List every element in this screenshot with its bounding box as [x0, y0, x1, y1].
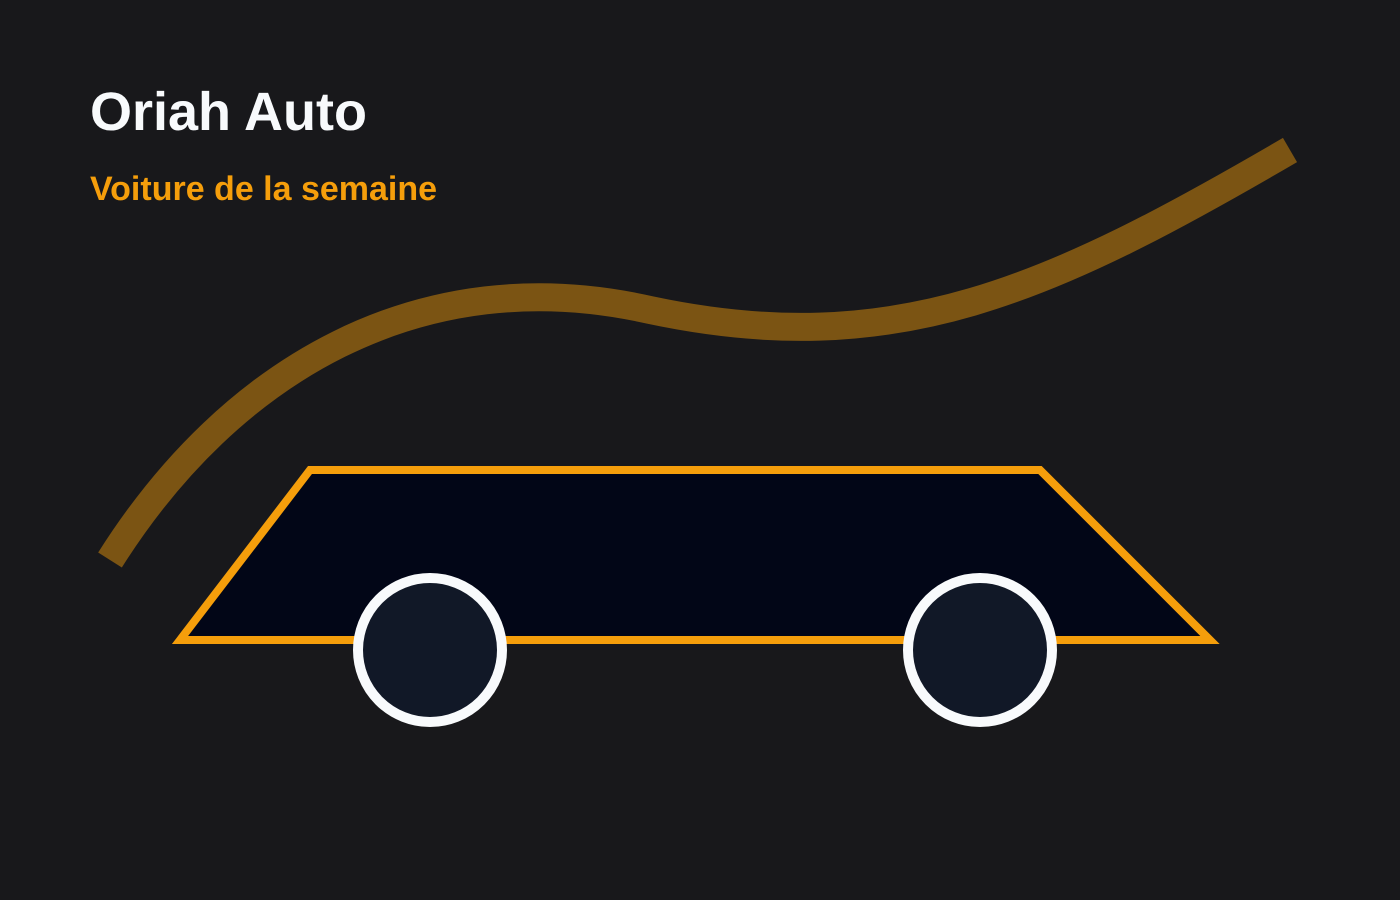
subtitle: Voiture de la semaine: [90, 170, 437, 208]
title: Oriah Auto: [90, 82, 367, 142]
road curve: [110, 150, 1290, 560]
front wheel: [358, 578, 502, 722]
rear wheel: [908, 578, 1052, 722]
car body: [180, 470, 1210, 640]
